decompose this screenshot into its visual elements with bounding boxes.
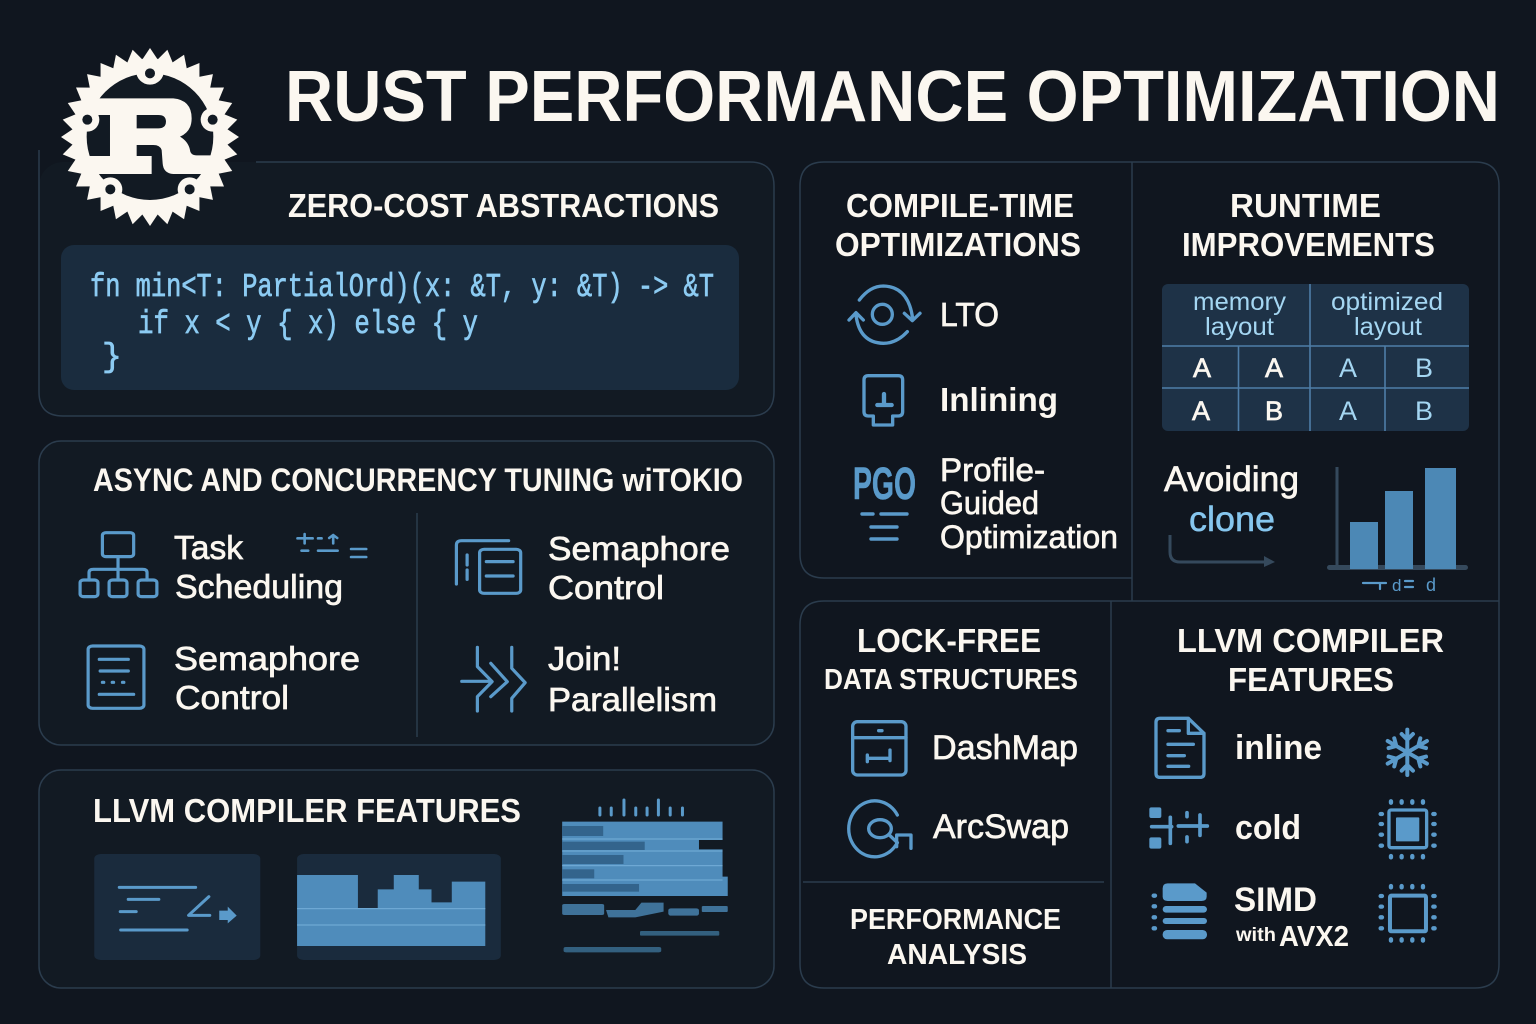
heading: llvm compiler features: LLVM COMPILER FEATURES (93, 792, 521, 829)
code block: } (102, 339, 122, 376)
panel: compile-time and runtime (800, 162, 1499, 601)
table: memory layout: A (1339, 396, 1357, 426)
chart: clone bar chart (1327, 467, 1468, 595)
heading: compile-time optimizations (835, 187, 1081, 263)
item: join parallelism: Parallelism (548, 681, 717, 718)
label: SIMD with AVX2: SIMD (1234, 881, 1317, 919)
icon: PGO (853, 458, 916, 539)
label: arcswap: ArcSwap (933, 808, 1069, 846)
panel: async and concurrency tuning (39, 441, 774, 745)
icon: join arrows (462, 647, 525, 711)
item: join parallelism (548, 640, 717, 718)
label: dashmap: DashMap (932, 729, 1078, 767)
item: semaphore control right: Control (548, 569, 664, 606)
icon: semaphore list (88, 646, 144, 708)
icon: arcswap (849, 801, 911, 857)
table: memory layout: B (1265, 396, 1283, 426)
heading: runtime improvements: IMPROVEMENTS (1182, 226, 1435, 263)
heading: llvm compiler features right: FEATURES (1228, 661, 1394, 698)
label: inline: inline (1235, 729, 1322, 767)
label: profile-guided optimization: Profile- (940, 452, 1045, 488)
heading: compile-time optimizations: COMPILE-TIME (846, 187, 1074, 224)
icon: task scheduling tree (80, 533, 157, 597)
heading: lock-free data structures: DATA STRUCTURES (824, 664, 1078, 696)
heading: llvm compiler features right (1177, 622, 1444, 698)
icon: PGO: PGO (853, 458, 916, 509)
label: avoiding clone: Avoiding (1164, 460, 1299, 499)
heading: compile-time optimizations: OPTIMIZATIONS (835, 226, 1081, 263)
heading: runtime improvements (1182, 187, 1435, 263)
icon: LTO cycle (849, 286, 920, 343)
table: memory layout (1162, 284, 1469, 431)
heading: zero-cost abstractions: ZERO-COST ABSTRACTIONS (288, 187, 719, 224)
heading: lock-free data structures: LOCK-FREE (857, 622, 1041, 659)
table: memory layout: A (1193, 353, 1211, 383)
label: inlining: Inlining (940, 381, 1058, 418)
label: SIMD with AVX2: with (1235, 925, 1276, 946)
arrow: clone path (1170, 535, 1275, 567)
icon: cold symbols (1149, 807, 1207, 849)
label: profile-guided optimization: Optimization (940, 519, 1118, 555)
icon: semaphore stacked document (456, 541, 521, 593)
chart: stacked bars (562, 800, 728, 952)
icon: chip solid (1381, 801, 1435, 857)
heading: lock-free data structures (824, 622, 1078, 696)
label: SIMD with AVX2 (1234, 881, 1349, 953)
icon: dashmap (853, 722, 906, 775)
icon: snowflake (1385, 730, 1430, 775)
code block: fn min<T: PartialOrd)(x: &T, y: &T) -> &T (90, 269, 714, 306)
icon: document (1156, 718, 1204, 777)
code block (61, 245, 739, 390)
table: memory layout: A (1265, 353, 1283, 383)
panel: lock-free and llvm features (800, 601, 1499, 988)
panel: llvm compiler features left (39, 770, 774, 988)
card: code arrow (94, 854, 260, 960)
heading: performance analysis (850, 904, 1061, 971)
table: memory layout: B (1415, 396, 1433, 426)
card: skyline chart (297, 854, 501, 960)
icon: small operator symbols (297, 534, 366, 557)
table: memory layout: A (1192, 396, 1210, 426)
table: memory layout: optimized (1331, 288, 1443, 316)
item: semaphore control left: Control (175, 679, 289, 716)
table: memory layout: B (1415, 353, 1433, 383)
item: task scheduling (174, 529, 343, 605)
item: join parallelism: Join! (548, 640, 621, 677)
item: task scheduling: Task (174, 529, 244, 566)
icon: chip outline (1381, 886, 1435, 941)
chart: clone bar chart: d (1392, 576, 1401, 595)
item: task scheduling: Scheduling (175, 568, 343, 605)
panel: zero-cost abstractions (39, 150, 774, 416)
label: avoiding clone: clone (1189, 500, 1275, 539)
table: memory layout: memory (1193, 288, 1287, 316)
heading: runtime improvements: RUNTIME (1230, 187, 1381, 224)
item: semaphore control left: Semaphore (174, 640, 360, 677)
code block: if x < y { x) else { y (138, 306, 478, 343)
heading: performance analysis: PERFORMANCE (850, 904, 1061, 936)
table: memory layout: layout (1205, 313, 1274, 341)
label: cold: cold (1235, 809, 1301, 847)
chart: clone bar chart: d (1426, 575, 1436, 595)
heading: llvm compiler features right: LLVM COMPILER (1177, 622, 1444, 659)
icon: SIMD stack (1154, 883, 1207, 939)
table: memory layout: A (1339, 353, 1357, 383)
label: avoiding clone (1164, 460, 1299, 539)
item: semaphore control left (174, 640, 360, 716)
item: semaphore control right: Semaphore (548, 530, 730, 567)
heading: async and concurrency: ASYNC AND CONCURRENCY TUNING wiTOKIO (93, 462, 743, 498)
table: memory layout: layout (1354, 313, 1422, 341)
heading: performance analysis: ANALYSIS (887, 939, 1027, 971)
label: SIMD with AVX2: AVX2 (1279, 921, 1349, 953)
logo: rust gear (61, 48, 239, 226)
icon: inlining (864, 376, 903, 425)
item: semaphore control right (548, 530, 730, 606)
label: profile-guided optimization: Guided (940, 485, 1039, 521)
label: LTO: LTO (940, 296, 999, 333)
label: profile-guided optimization (940, 452, 1118, 555)
